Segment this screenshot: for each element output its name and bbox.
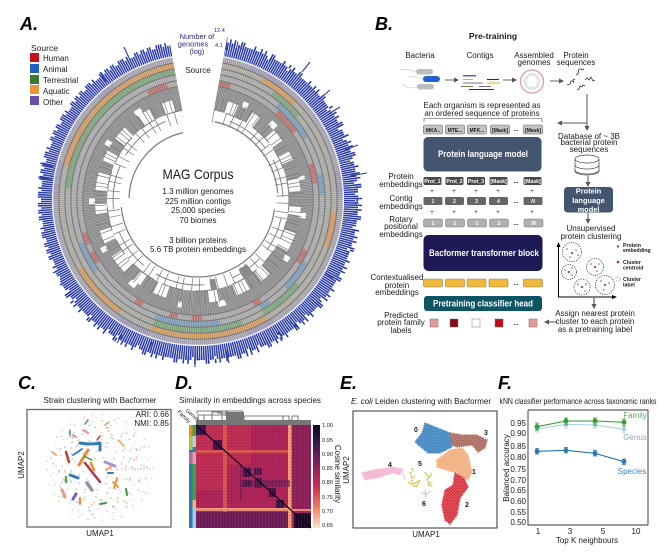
icon: contigs — [461, 76, 500, 90]
panel label B: B. — [375, 14, 393, 34]
y axis ticks: 0.85 — [510, 442, 527, 451]
series labels: Species — [618, 467, 646, 476]
text: organism description — [424, 101, 540, 118]
label: contextualised protein embeddings — [371, 273, 423, 297]
label: predicted protein family labels: Predicted — [384, 311, 418, 320]
contig embeddings row: 1 — [432, 199, 435, 205]
icon: bacteria — [401, 69, 440, 90]
label: rotary positional embeddings: embeddings — [379, 230, 423, 239]
axis titles: Balanced accuracy — [502, 434, 511, 502]
rotary embeddings row: 1 — [476, 221, 479, 227]
cluster 6 light blue — [421, 490, 431, 498]
colour bar ticks: 0.65 — [322, 523, 333, 529]
metrics: NMI: 0.85 — [134, 419, 170, 428]
cluster numbers — [388, 427, 488, 509]
contig embeddings row: N — [531, 199, 535, 205]
axis titles: Top K neighbours — [556, 536, 618, 545]
protein embeddings row: Prot_2 — [446, 179, 463, 185]
contig embeddings row — [424, 197, 542, 205]
axis labels: UMAP2 — [342, 456, 351, 484]
colour bar ticks: 0.70 — [322, 509, 333, 515]
title D: Similarity in embeddings across species — [179, 396, 321, 405]
y axis ticks: 0.55 — [510, 508, 527, 517]
input token row: ... — [513, 127, 519, 133]
series labels: Genus — [623, 433, 647, 442]
centre statistics: 25,000 species — [171, 206, 225, 215]
genome count scale label: (log) — [190, 47, 204, 56]
genome count scale label: Number of — [180, 32, 215, 41]
source legend: Other — [43, 98, 63, 107]
arrow: database to input tokens — [558, 122, 587, 124]
plus signs: + — [530, 210, 534, 216]
label: predicted protein family labels: protein family — [377, 318, 425, 327]
prominent clusters — [52, 420, 127, 504]
y axis ticks: 0.60 — [510, 497, 527, 506]
colour bar ticks: 0.85 — [322, 466, 333, 472]
label: protein embeddings: embeddings — [379, 180, 423, 189]
genome count scale label — [178, 28, 225, 56]
series labels: Family — [623, 411, 647, 420]
panel label D: D. — [175, 373, 193, 393]
dots: ... — [513, 321, 519, 327]
cluster legend: Cluster — [623, 260, 641, 266]
cluster legend: centroid — [623, 266, 643, 272]
label: contig embeddings: embeddings — [379, 202, 423, 211]
box: pretraining classifier head: Pretraining classifier head — [433, 298, 533, 308]
plus signs: + — [452, 210, 456, 216]
genome count bars — [40, 42, 356, 358]
y axis ticks — [510, 419, 527, 527]
label: rotary positional embeddings: positional — [384, 222, 418, 231]
input token row: [Mask] — [525, 128, 541, 134]
spike bars — [38, 37, 367, 367]
text: assign cluster — [555, 309, 635, 334]
plus signs: + — [474, 210, 478, 216]
x axis ticks — [536, 527, 641, 536]
cluster scatter diagram — [556, 242, 617, 299]
panel label C: C. — [18, 373, 36, 393]
centre statistics: 225 million contigs — [165, 197, 231, 206]
source legend — [30, 43, 78, 107]
cluster numbers: 3 — [484, 430, 488, 437]
protein embeddings row: [Mask] — [490, 179, 507, 185]
contig embeddings row: ... — [513, 199, 519, 205]
source legend: Terrestrial — [43, 76, 78, 85]
step labels: Bacteria — [405, 51, 435, 60]
colour bar ticks: 0.90 — [322, 452, 333, 458]
source legend: Human — [43, 54, 69, 63]
contig embeddings row: 4 — [497, 199, 500, 205]
genus and family colour strips — [189, 425, 196, 528]
x axis ticks: 5 — [601, 527, 606, 536]
text: database — [558, 132, 620, 154]
arrow: bacteria to contigs — [445, 79, 458, 81]
label: rotary positional embeddings — [379, 215, 423, 239]
step labels: sequences — [557, 58, 595, 67]
plus signs: + — [474, 189, 478, 195]
box: Bacformer transformer block — [424, 235, 542, 271]
cluster numbers: 1 — [472, 469, 476, 476]
source legend: Animal — [43, 65, 68, 74]
panel A: MAG corpus circular tree — [19, 14, 367, 367]
text: assign cluster: Assign nearest protein — [555, 309, 635, 318]
rotary embeddings row — [424, 219, 543, 227]
centre statistics: 3 billion proteins — [169, 236, 227, 245]
label: contig embeddings: Contig — [389, 194, 413, 203]
icon: assembled genome circle — [520, 70, 544, 93]
plot frame — [528, 410, 648, 525]
biome and source rings — [53, 55, 343, 345]
bracket — [424, 118, 542, 122]
dots: ... — [513, 281, 519, 287]
axis labels: UMAP1 — [412, 530, 440, 539]
genus and family labels — [176, 408, 200, 425]
cluster legend — [616, 243, 651, 288]
panel label A: A. — [19, 14, 38, 34]
metrics: ARI: 0.66 — [136, 410, 170, 419]
label: contextualised protein embeddings: Contextualised — [371, 273, 423, 282]
arrow: protein sequences to database — [586, 94, 588, 130]
colour bar — [313, 425, 320, 528]
protein embeddings row: Prot_1 — [424, 179, 441, 185]
longer genome count bars on the right and bottom — [36, 38, 360, 362]
protein embeddings row: Prot_3 — [468, 179, 484, 185]
UMAP frame — [27, 410, 171, 527]
predicted labels row — [430, 319, 537, 327]
text: database: Database of ~ 3B — [558, 132, 620, 141]
dendrogram — [196, 411, 311, 425]
label: rotary positional embeddings: Rotary — [389, 215, 413, 224]
contig embeddings row: 3 — [475, 199, 478, 205]
y axis ticks: 0.75 — [510, 465, 527, 474]
heading pre-training: Pre-training — [469, 31, 517, 41]
plus signs: + — [430, 210, 434, 216]
cluster numbers: 4 — [388, 462, 392, 469]
box: protein language model small — [564, 186, 613, 214]
metrics — [134, 410, 170, 428]
step labels: Protein — [563, 51, 589, 60]
y axis ticks: 0.65 — [510, 486, 527, 495]
arrow: genomes to protein sequences — [550, 80, 563, 82]
cluster numbers: 0 — [414, 427, 418, 434]
step labels — [405, 51, 595, 67]
y axis ticks: 0.70 — [510, 476, 527, 485]
text: database: sequences — [570, 145, 608, 154]
centre statistics: 5.6 TB protein embeddings — [150, 245, 246, 254]
x axis ticks: 3 — [568, 527, 573, 536]
tree branches — [100, 102, 296, 298]
label: contextualised protein embeddings: protein — [385, 281, 409, 290]
centre statistics — [150, 187, 246, 254]
label: protein embeddings: Protein — [388, 172, 414, 181]
input token row: MTE... — [448, 128, 463, 134]
cluster numbers: 6 — [422, 501, 426, 508]
icon: protein sequences squiggles — [567, 69, 595, 90]
genome count scale label: genomes — [178, 40, 209, 48]
step labels: Assembled — [514, 51, 554, 60]
label: protein embeddings — [379, 172, 423, 189]
box: Bacformer transformer block: Bacformer transformer block — [429, 248, 539, 258]
y axis ticks: 0.95 — [510, 419, 527, 428]
rotary embeddings row: 1 — [432, 221, 435, 227]
plus signs: + — [496, 189, 500, 195]
x axis ticks: 10 — [632, 527, 641, 536]
cluster 1 orange — [437, 448, 472, 480]
y axis ticks: 0.50 — [510, 518, 527, 527]
title C: Strain clustering with Bacformer — [44, 396, 157, 405]
plus signs: + — [496, 210, 500, 216]
colour bar ticks — [322, 423, 333, 529]
centre statistics: 70 biomes — [180, 216, 216, 225]
axis labels — [17, 451, 114, 538]
panel D: similarity heatmap — [175, 373, 342, 529]
box: pretraining classifier head — [424, 296, 542, 311]
panel E: E. coli Leiden clustering — [340, 373, 497, 539]
box: protein language model small: Protein — [576, 186, 602, 196]
UMAP frame — [353, 411, 497, 528]
centre title: MAG Corpus — [162, 166, 234, 182]
contextualised embeddings row — [424, 279, 542, 287]
text: assign cluster: cluster to each protein — [556, 317, 634, 326]
tree base radial lines — [95, 97, 301, 303]
y axis ticks: 0.80 — [510, 453, 527, 462]
title E: E. coli Leiden clustering with Bacformer — [351, 397, 491, 406]
text: database: bacterial protein — [561, 138, 617, 147]
text: organism description: Each organism is represented as — [424, 101, 540, 110]
panel label F: F. — [498, 373, 512, 393]
cluster 5 yellow — [408, 468, 433, 487]
label: contig embeddings — [379, 194, 423, 211]
gap at top of circle — [166, 22, 230, 131]
plus signs: + — [452, 189, 456, 195]
line: species — [535, 448, 626, 464]
cluster legend: embedding — [623, 248, 651, 254]
input token row: MFK... — [470, 128, 485, 134]
label: contextualised protein embeddings: embeddings — [375, 288, 419, 297]
box: protein language model — [424, 137, 542, 172]
text: organism description: an ordered sequence of proteins — [424, 109, 540, 118]
axis labels: UMAP1 — [86, 529, 114, 538]
box: protein language model small: model — [578, 205, 599, 214]
input token row: [Mask] — [492, 128, 508, 134]
arrow: contigs to genomes — [503, 79, 516, 81]
protein embeddings row — [424, 177, 542, 185]
centre statistics: 1.3 million genomes — [162, 187, 234, 196]
arrow: clusters to assign — [593, 298, 595, 308]
cluster 2 red — [442, 473, 468, 524]
axis labels: UMAP2 — [17, 451, 26, 479]
cluster 4 pink — [362, 467, 405, 480]
genus and family labels: Family — [176, 409, 191, 425]
arrow: database to language model — [587, 176, 589, 186]
cluster legend: Cluster — [623, 277, 641, 283]
source legend: Source — [31, 43, 58, 53]
axis labels — [342, 456, 440, 539]
step labels: Contigs — [466, 51, 494, 60]
panel C: strain clustering UMAP — [17, 373, 171, 538]
input token row — [424, 125, 542, 134]
x axis ticks: 1 — [536, 527, 541, 536]
axis titles — [502, 434, 618, 545]
colour bar ticks: 0.80 — [322, 480, 333, 486]
source legend: Aquatic — [43, 87, 70, 96]
line: genus — [535, 421, 626, 433]
protein embeddings row: [Mask] — [524, 179, 541, 185]
tree white patches — [92, 94, 304, 306]
colour bar title: Cosine similarity — [333, 445, 342, 503]
genus and family labels: Genus — [184, 408, 200, 423]
text: assign cluster: as a pretraining label — [558, 325, 632, 334]
box: protein language model small: language — [572, 196, 605, 205]
rotary embeddings row: 1 — [454, 221, 457, 227]
label: predicted protein family labels — [377, 311, 425, 335]
label: predicted protein family labels: labels — [391, 326, 411, 335]
icon: database cylinder — [575, 155, 599, 175]
genome count scale label: 12.4 — [214, 28, 225, 34]
genome count scale label: 4.1 — [215, 43, 223, 49]
colour bar ticks: 0.95 — [322, 438, 333, 444]
line: family — [535, 418, 626, 430]
text: unsupervised clustering: Unsupervised — [567, 224, 615, 233]
contig embeddings row: 2 — [453, 199, 456, 205]
arrow: language model to clustering — [587, 213, 589, 223]
cluster legend: label — [623, 282, 635, 288]
heatmap — [196, 425, 311, 528]
plus signs: + — [430, 189, 434, 195]
y axis ticks: 0.90 — [510, 429, 527, 438]
text: unsupervised clustering: protein clustering — [561, 232, 621, 241]
input token row: MKA.. — [426, 128, 441, 134]
plus signs — [430, 189, 534, 216]
colour bar ticks: 1.00 — [322, 423, 333, 429]
cluster 0 blue — [415, 423, 452, 453]
plus signs: + — [530, 189, 534, 195]
rotary embeddings row: ... — [513, 221, 519, 227]
rotary embeddings row: M — [531, 221, 536, 227]
series labels — [618, 411, 647, 476]
scatter points — [47, 415, 153, 521]
panel F: kNN classifier performance — [498, 373, 656, 545]
panel label E: E. — [340, 373, 357, 393]
text: unsupervised clustering — [561, 224, 621, 241]
rotary embeddings row: 2 — [498, 221, 501, 227]
cluster legend: Protein — [623, 243, 641, 249]
source ring label: Source — [185, 66, 211, 75]
protein embeddings row: ... — [513, 179, 519, 185]
panel B: pre-training schematic — [371, 14, 651, 335]
cluster numbers: 2 — [465, 502, 469, 509]
cluster 3 brown — [450, 433, 487, 452]
cluster numbers: 5 — [418, 461, 422, 468]
step labels: genomes — [518, 58, 550, 67]
box: protein language model: Protein language model — [438, 149, 528, 159]
arrow: cluster to labels — [545, 321, 557, 323]
colour bar ticks: 0.75 — [322, 495, 333, 501]
